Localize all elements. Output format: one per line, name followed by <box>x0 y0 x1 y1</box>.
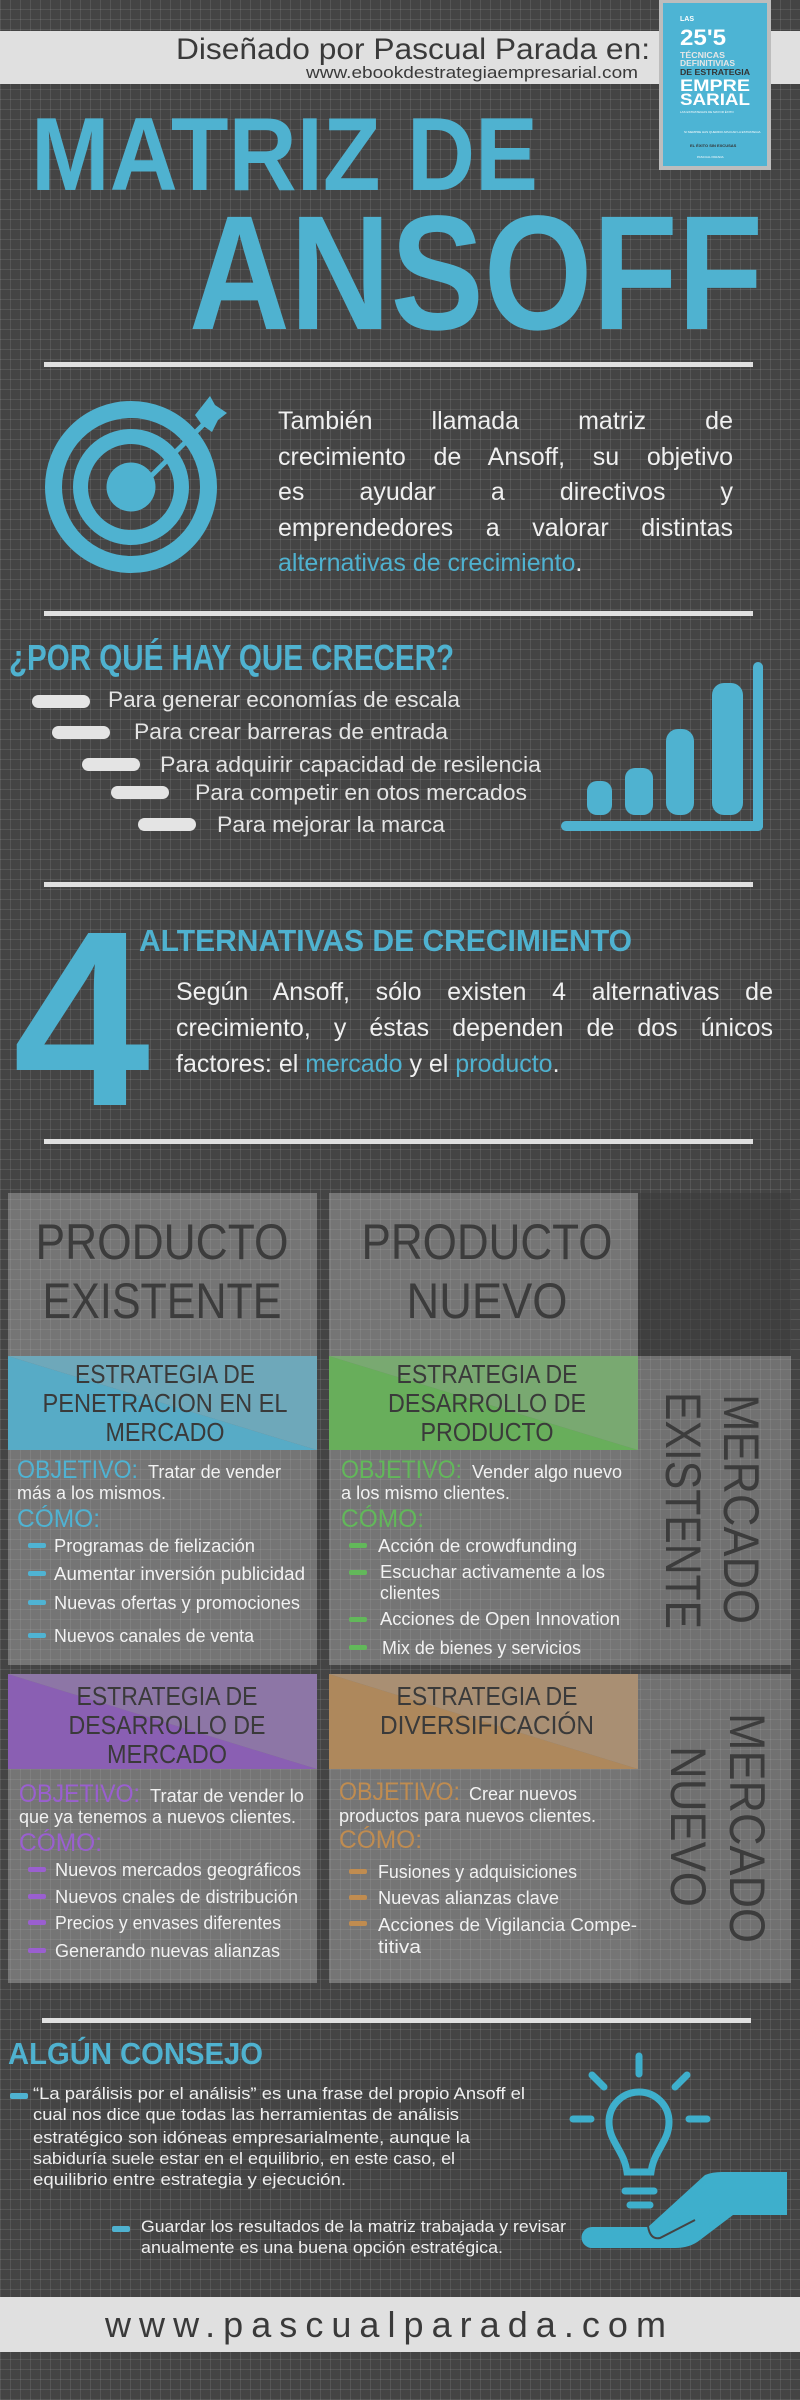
icon: lightbulb in hand <box>573 2056 787 2248</box>
row header: mercado nuevo <box>660 1713 775 1943</box>
panel: desarrollo de producto: Mix de bienes y servicios <box>382 1638 581 1658</box>
row header: mercado nuevo: NUEVO <box>660 1746 716 1907</box>
matrix <box>8 1193 791 1983</box>
panel: penetracion: Tratar de vender <box>148 1462 281 1482</box>
tip 2 <box>112 2217 566 2257</box>
panel: penetracion: Nuevos canales de venta <box>54 1626 255 1646</box>
panel: desarrollo de producto: CÓMO: <box>341 1504 424 1533</box>
panel: desarrollo de mercado: Nuevos cnales de distribución <box>55 1887 298 1907</box>
column header: producto existente <box>36 1214 288 1329</box>
list: reasons: Para crear barreras de entrada <box>134 719 449 744</box>
panel: desarrollo de mercado: CÓMO: <box>19 1828 102 1857</box>
book cover: EL ÉXITO SIN EXCUSAS <box>690 143 737 148</box>
alternatives paragraph: crecimiento, y éstas dependen de dos únicos <box>176 1014 773 1042</box>
tip 1: cual nos dice que todas las herramientas de análisis <box>33 2105 459 2124</box>
panel: desarrollo de mercado: MERCADO <box>107 1739 227 1769</box>
book cover: SI SIEMPRE HAS QUERIDO APLICAR LA ESTRATEGIA <box>684 130 760 134</box>
heading: alternativas: ALTERNATIVAS DE CRECIMIENTO <box>139 923 632 958</box>
intro paragraph: También llamada matriz de <box>278 407 733 435</box>
panel: desarrollo de producto: Acciones de Open Innovation <box>380 1609 620 1629</box>
list: reasons <box>32 687 542 837</box>
title <box>31 97 763 364</box>
column header: producto nuevo: PRODUCTO <box>362 1214 612 1270</box>
panel: desarrollo de producto: Vender algo nuevo <box>472 1462 622 1482</box>
panel: desarrollo de mercado: Precios y envases diferentes <box>55 1913 281 1933</box>
heading: por que crecer: ¿POR QUÉ HAY QUE CRECER? <box>9 637 454 678</box>
panel: diversificacion: Acciones de Vigilancia Compe- <box>378 1915 637 1935</box>
column header: producto existente: EXISTENTE <box>42 1273 282 1329</box>
panel: diversificacion: CÓMO: <box>339 1825 422 1854</box>
panel: desarrollo de mercado: ESTRATEGIA DE <box>76 1681 258 1711</box>
panel: desarrollo de producto: a los mismo clientes. <box>341 1483 510 1503</box>
panel: desarrollo de producto: Acción de crowdfunding <box>378 1536 577 1556</box>
panel: penetracion: Nuevas ofertas y promociones <box>54 1593 300 1613</box>
list: reasons: Para adquirir capacidad de resilencia <box>160 752 542 777</box>
tip 2: Guardar los resultados de la matriz trabajada y revisar <box>141 2217 566 2236</box>
row header: mercado existente: EXISTENTE <box>655 1392 711 1629</box>
panel: desarrollo de producto <box>329 1356 638 1658</box>
list: reasons: Para mejorar la marca <box>217 812 446 837</box>
tip 1: “La parálisis por el análisis” es una frase del propio Ansoff el <box>33 2084 525 2103</box>
panel: penetracion: CÓMO: <box>17 1504 100 1533</box>
row header: mercado existente: MERCADO <box>713 1394 769 1624</box>
intro paragraph: crecimiento de Ansoff, su objetivo <box>278 442 733 470</box>
top band <box>0 31 800 84</box>
panel: diversificacion: Nuevas alianzas clave <box>378 1888 559 1908</box>
tip 1: estratégico son idóneas empresarialmente, aunque la <box>33 2128 471 2147</box>
panel: desarrollo de producto: PRODUCTO <box>420 1417 554 1447</box>
tip 1 <box>10 2084 525 2189</box>
panel: desarrollo de mercado: Tratar de vender lo <box>150 1786 304 1806</box>
book cover: LAS ESTRATEGIAS DE MAYOR ÉXITO <box>680 109 734 114</box>
book cover: TÉCNICAS <box>680 51 726 60</box>
panel: penetracion: OBJETIVO: <box>17 1456 138 1484</box>
big number 4: 4 <box>13 879 150 1158</box>
footer band <box>0 2297 800 2352</box>
book cover: 25'5 <box>680 25 726 50</box>
column header: producto existente: PRODUCTO <box>36 1214 288 1270</box>
panel: diversificacion: productos para nuevos clientes. <box>339 1806 596 1826</box>
panel: diversificacion: Crear nuevos <box>469 1784 577 1804</box>
panel: desarrollo de mercado: DESARROLLO DE <box>68 1710 266 1740</box>
intro paragraph: alternativas de crecimiento. <box>278 549 582 577</box>
panel: penetracion: ESTRATEGIA DE <box>75 1359 255 1389</box>
book cover: DE ESTRATEGIA <box>680 68 750 77</box>
heading: algun consejo: ALGÚN CONSEJO <box>8 2035 263 2071</box>
panel: desarrollo de producto: clientes <box>380 1583 440 1603</box>
chart icon <box>561 662 763 831</box>
panel: diversificacion: OBJETIVO: <box>339 1778 460 1806</box>
book cover: PASCUAL PARADA <box>697 155 724 159</box>
panel: diversificacion: Fusiones y adquisiciones <box>378 1862 577 1882</box>
list: reasons: Para generar economías de escala <box>108 687 461 712</box>
panel: desarrollo de mercado: Generando nuevas alianzas <box>55 1941 280 1961</box>
panel: penetracion: PENETRACION EN EL <box>42 1388 288 1418</box>
tip 2: anualmente es una buena opción estratégica. <box>141 2238 503 2257</box>
intro paragraph: emprendedores a valorar distintas <box>278 514 733 542</box>
column header: producto nuevo <box>362 1214 612 1329</box>
panel: diversificacion: DIVERSIFICACIÓN <box>380 1710 594 1740</box>
panel: penetracion: Aumentar inversión publicidad <box>54 1564 305 1584</box>
panel: desarrollo de mercado: Nuevos mercados geográficos <box>55 1860 301 1880</box>
footer band: www.pascualparada.com <box>104 2304 666 2345</box>
panel: desarrollo de mercado: que ya tenemos a nuevos clientes. <box>19 1807 296 1827</box>
alternatives paragraph: Según Ansoff, sólo existen 4 alternativas de <box>176 978 773 1006</box>
alternatives paragraph: factores: el mercado y el producto. <box>176 1050 560 1078</box>
icon: target <box>54 396 227 564</box>
book cover: EMPRE <box>680 76 750 95</box>
list: reasons: Para competir en otos mercados <box>195 780 527 805</box>
panel: desarrollo de mercado <box>8 1674 317 1961</box>
panel: penetracion: más a los mismos. <box>17 1483 166 1503</box>
panel: diversificacion <box>329 1674 638 1957</box>
panel: desarrollo de producto: Escuchar activamente a los <box>380 1562 605 1582</box>
panel: penetracion: Programas de fielización <box>54 1536 255 1556</box>
intro paragraph: es ayudar a directivos y <box>278 478 733 506</box>
tip 1: equilibrio entre estrategia y ejecución. <box>33 2170 346 2189</box>
row header: mercado nuevo: MERCADO <box>719 1713 775 1943</box>
book cover: DEFINITIVIAS <box>680 59 736 68</box>
column header: producto nuevo: NUEVO <box>406 1273 568 1329</box>
panel: diversificacion: ESTRATEGIA DE <box>396 1681 578 1711</box>
tip 1: sabiduría suele estar en el equilibrio, en este caso, el <box>33 2149 455 2168</box>
panel: penetracion <box>8 1356 317 1646</box>
title: MATRIZ DE <box>31 97 538 213</box>
panel: diversificacion: titiva <box>378 1937 422 1957</box>
panel: desarrollo de producto: DESARROLLO DE <box>388 1388 586 1418</box>
panel: desarrollo de mercado: OBJETIVO: <box>19 1780 140 1808</box>
top band: www.ebookdestrategiaempresarial.com <box>305 63 638 82</box>
top band: Diseñado por Pascual Parada en: <box>176 33 650 66</box>
row header: mercado existente <box>655 1392 769 1629</box>
book cover: SARIAL <box>680 90 750 109</box>
book cover: LAS <box>680 16 694 23</box>
intro paragraph <box>278 407 733 577</box>
alternatives paragraph <box>176 978 773 1078</box>
panel: desarrollo de producto: ESTRATEGIA DE <box>396 1359 578 1389</box>
panel: penetracion: MERCADO <box>106 1417 224 1447</box>
book cover <box>659 0 771 170</box>
panel: desarrollo de producto: OBJETIVO: <box>341 1456 462 1484</box>
